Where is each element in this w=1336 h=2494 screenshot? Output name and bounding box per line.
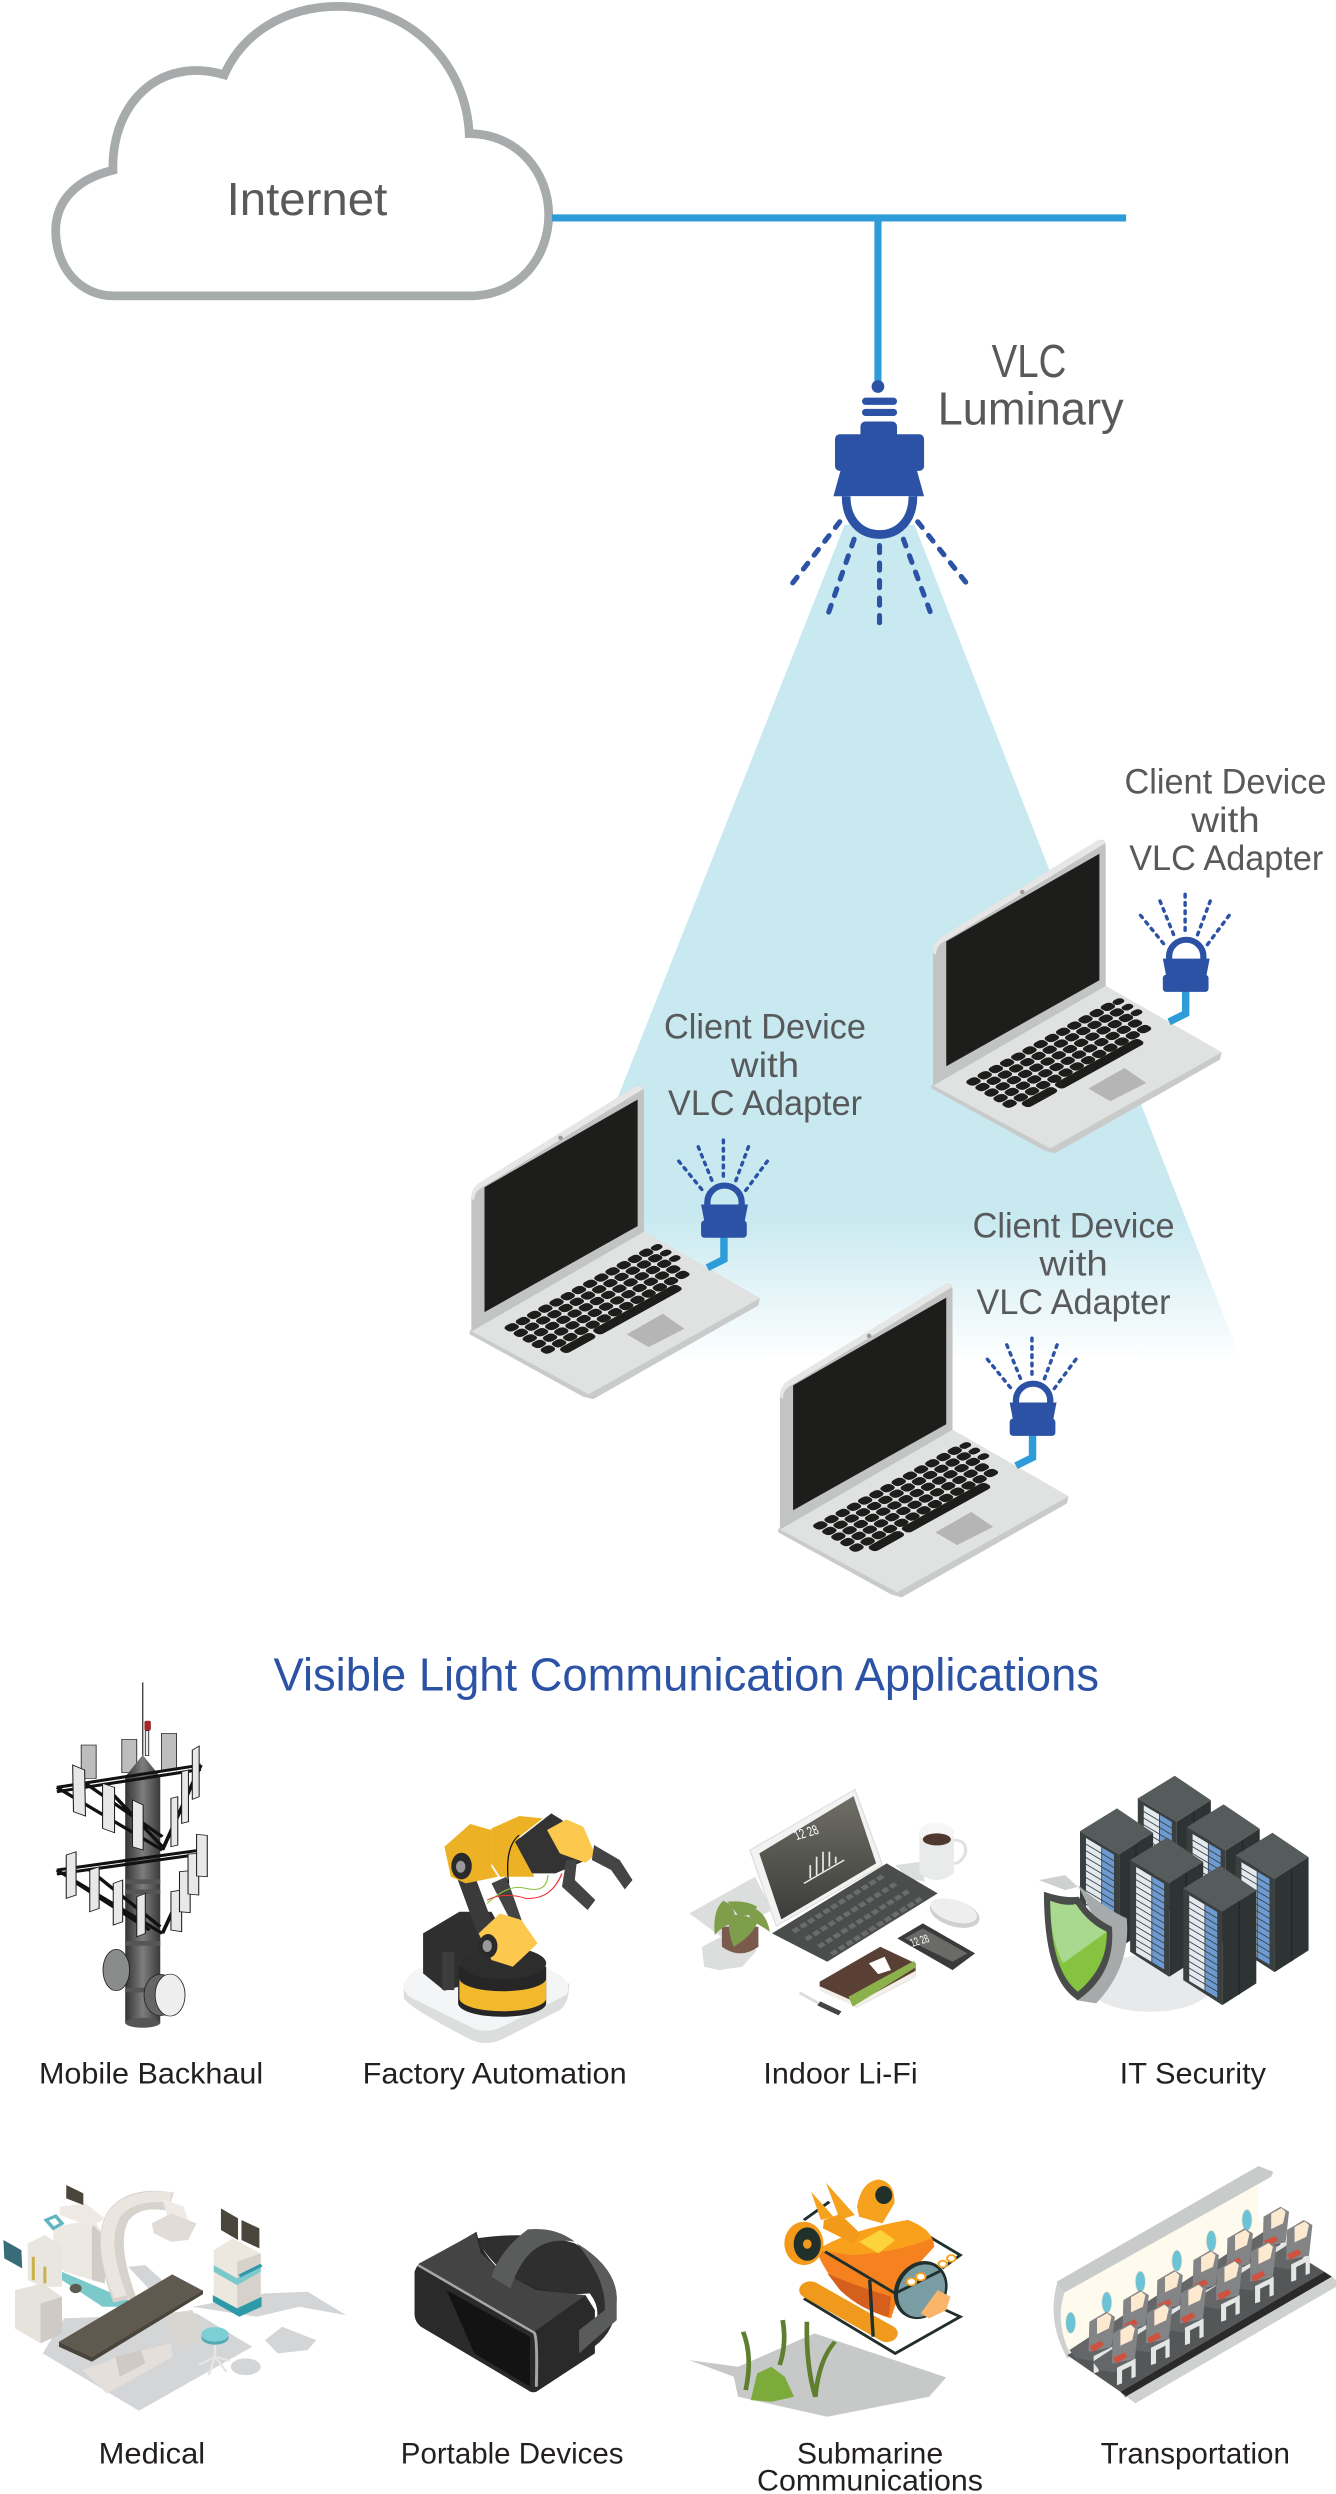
icon: medical room xyxy=(3,2185,346,2411)
label: Factory Automation: Factory Automation xyxy=(363,2058,627,2091)
label: client device bottom: VLC Adapter xyxy=(977,1283,1171,1322)
label: client device right xyxy=(1124,763,1326,878)
icon: tablet desk xyxy=(689,1789,985,2013)
label: Submarine Communications xyxy=(757,2438,983,2494)
label: client device right: Client Device xyxy=(1124,763,1326,802)
label: client device left: VLC Adapter xyxy=(668,1084,862,1123)
label: VLC Luminary xyxy=(938,335,1124,435)
laptop: left xyxy=(470,1086,760,1399)
label: VLC Luminary: VLC xyxy=(992,335,1066,387)
icon: tablet desk: 12 28 xyxy=(792,1823,821,1843)
cloud: internet xyxy=(56,6,549,296)
adapter: right xyxy=(1141,894,1229,1022)
label: Submarine Communications: Submarine xyxy=(797,2438,943,2471)
label: client device right: with xyxy=(1190,801,1260,840)
label: client device left: Client Device xyxy=(664,1008,866,1047)
label: client device left xyxy=(664,1008,866,1123)
label: client device bottom: Client Device xyxy=(973,1206,1175,1245)
adapter: left xyxy=(679,1140,767,1268)
client laptops and adapters xyxy=(470,840,1229,1597)
label: client device bottom: with xyxy=(1038,1245,1108,1284)
laptop: bottom xyxy=(778,1284,1069,1597)
label: Indoor Li-Fi: Indoor Li-Fi xyxy=(763,2058,918,2091)
laptop: right xyxy=(931,840,1222,1153)
label: Transportation: Transportation xyxy=(1101,2438,1290,2471)
icon: cell tower xyxy=(57,1682,207,2028)
label: client device right: VLC Adapter xyxy=(1129,839,1324,878)
icon: airplane cabin xyxy=(1053,2166,1336,2403)
VLC luminary lamp xyxy=(792,380,967,627)
icon: tablet desk: 12 28 xyxy=(908,1932,931,1949)
network line xyxy=(552,218,1126,387)
light beam xyxy=(490,525,1256,1420)
heading: applications: Visible Light Communication Applications xyxy=(274,1649,1099,1701)
icon: submarine xyxy=(689,2179,960,2417)
icon: VR headset xyxy=(415,2229,617,2392)
label: client device bottom xyxy=(973,1206,1175,1322)
label: Internet: Internet xyxy=(227,173,387,225)
label: Medical: Medical xyxy=(99,2438,205,2471)
label: IT Security: IT Security xyxy=(1120,2058,1266,2091)
label: client device left: with xyxy=(730,1046,799,1085)
icon: robot arm xyxy=(404,1813,632,2043)
label: Mobile Backhaul: Mobile Backhaul xyxy=(39,2058,263,2091)
icon: servers and shield xyxy=(1039,1776,1309,2012)
label: VLC Luminary: Luminary xyxy=(938,383,1124,435)
label: Portable Devices: Portable Devices xyxy=(401,2438,623,2471)
adapter: bottom xyxy=(987,1338,1076,1466)
